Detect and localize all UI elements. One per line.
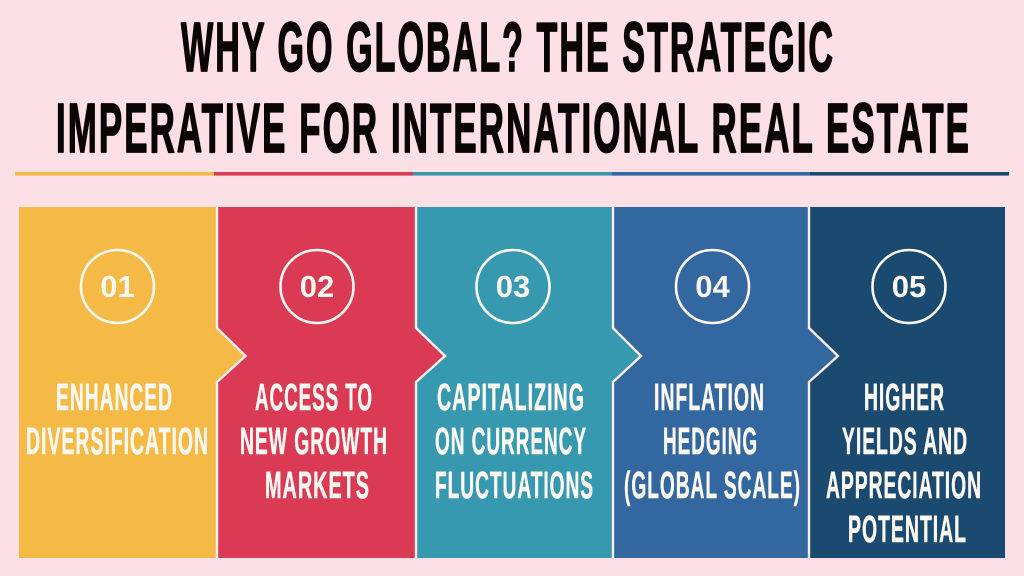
label 01: DIVERSIFICATION bbox=[26, 421, 209, 463]
badge 03 bbox=[476, 250, 550, 323]
badge 05 bbox=[872, 250, 946, 323]
label 04: (GLOBAL SCALE) bbox=[624, 465, 801, 507]
label 03 bbox=[435, 377, 594, 507]
badge 02: 02 bbox=[300, 269, 334, 304]
label 03: ON CURRENCY bbox=[435, 421, 587, 463]
panel 2: access to new growth markets bbox=[200, 207, 445, 558]
label 02: ACCESS TO bbox=[255, 377, 373, 419]
label 01 bbox=[26, 377, 209, 463]
label 01: ENHANCED bbox=[56, 377, 173, 419]
label 02: MARKETS bbox=[265, 465, 370, 507]
panel 1: enhanced diversification bbox=[19, 207, 246, 558]
badge 01: 01 bbox=[100, 269, 135, 304]
label 05: HIGHER bbox=[864, 377, 945, 419]
label 02 bbox=[240, 377, 388, 507]
label 02: NEW GROWTH bbox=[240, 421, 388, 463]
badge 02 bbox=[280, 250, 354, 323]
panel 5: higher yields and appreciation potential bbox=[780, 207, 1005, 558]
title bbox=[56, 8, 971, 167]
badge 04 bbox=[676, 250, 749, 323]
panel 3: capitalizing on currency fluctuations bbox=[400, 207, 641, 558]
badge 04: 04 bbox=[695, 269, 730, 304]
badge 05: 05 bbox=[892, 269, 926, 304]
label 03: FLUCTUATIONS bbox=[435, 465, 594, 507]
label 03: CAPITALIZING bbox=[437, 377, 585, 419]
label 04 bbox=[624, 377, 801, 507]
panel 4: inflation hedging bbox=[590, 207, 838, 558]
label 04: INFLATION bbox=[654, 377, 765, 419]
badge 01 bbox=[81, 250, 154, 323]
multicolour rule under title bbox=[15, 172, 1009, 176]
badge 03: 03 bbox=[496, 269, 530, 304]
label 04: HEDGING bbox=[663, 421, 758, 463]
label 05 bbox=[826, 377, 982, 551]
